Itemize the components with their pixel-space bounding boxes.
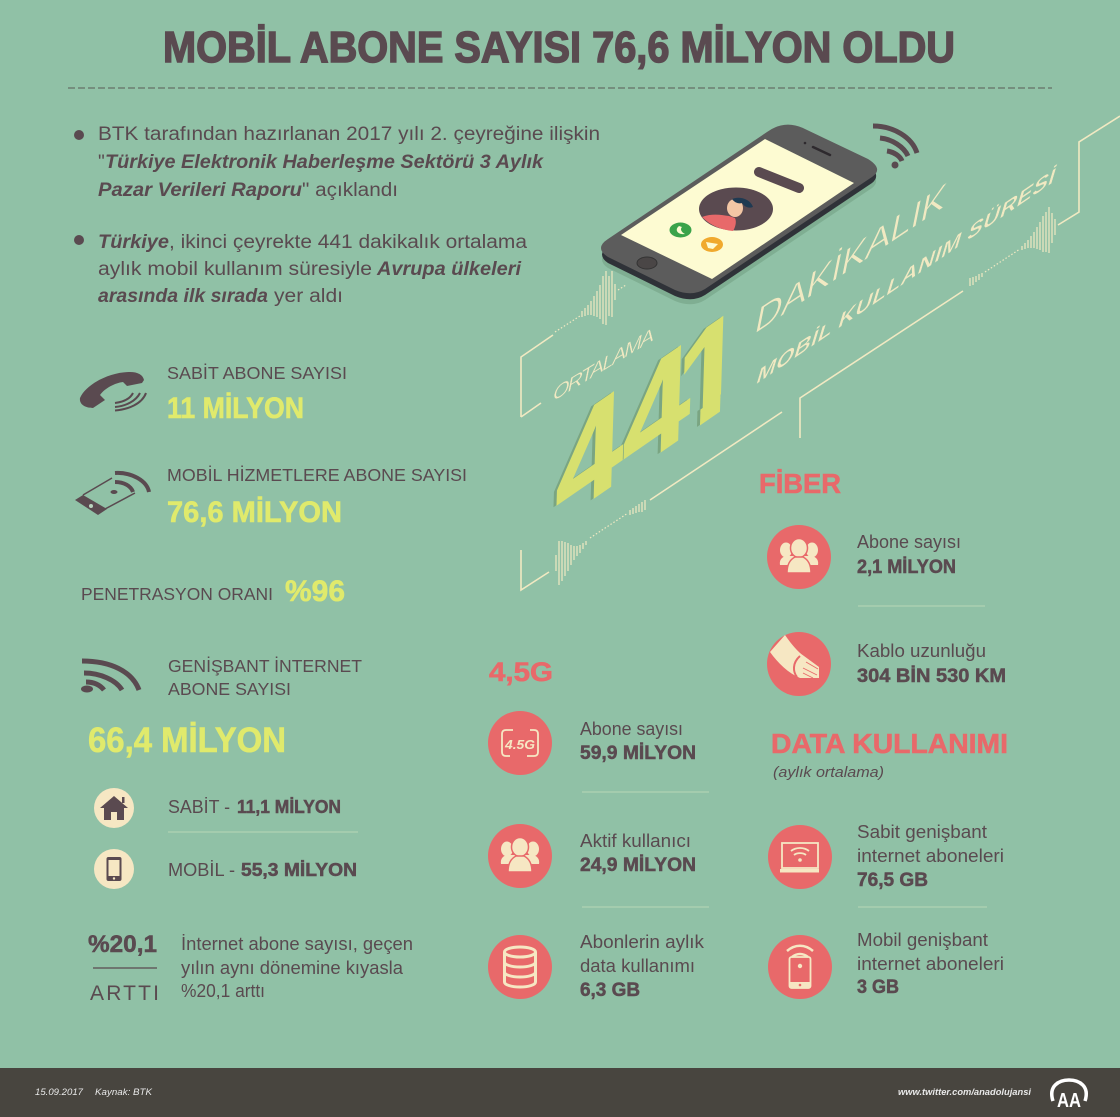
icon: 4.5G badge (488, 711, 552, 775)
panel: annual increase: ARTTI (90, 982, 159, 1005)
big number shadow (554, 318, 720, 507)
footer bar: www.twitter.com/anadolujansi (898, 1087, 1032, 1097)
item: mobile broadband data (768, 930, 1004, 999)
big number: 4 (621, 310, 693, 508)
item: fixed broadband: 11,1 MİLYON (237, 797, 341, 817)
big number: 1 (674, 273, 746, 471)
big number (556, 316, 724, 506)
item: active users: 24,9 MİLYON (580, 855, 696, 876)
item: monthly data per subscriber: Abonlerin aylık (580, 932, 705, 952)
big number shadow: 4 (551, 358, 623, 556)
text block: report intro: Pazar Verileri Raporu (98, 180, 302, 201)
text block: report intro (74, 124, 600, 201)
icon: fiber cable (767, 632, 831, 696)
panel: broadband subscribers: GENİŞBANT İNTERNET (168, 656, 362, 676)
heading: data usage: (aylık ortalama) (773, 765, 884, 781)
text block: usage ranking (74, 232, 527, 307)
callout: 441 minutes: MOBİL KULLANIM SÜRESİ (753, 161, 1059, 390)
item: mobile broadband data: Mobil genişbant (857, 930, 988, 950)
item: 4.5G subscribers: 59,9 MİLYON (580, 743, 696, 764)
callout: 441 minutes: ORTALAMA (551, 321, 657, 407)
panel: mobile subscribers: MOBİL HİZMETLERE ABONE SAYISI (167, 465, 467, 485)
icon: phone signal (873, 126, 917, 168)
item: 4.5G subscribers (488, 711, 696, 775)
panel: annual increase: İnternet abone sayısı, geçen (181, 934, 413, 954)
item: fixed broadband data (768, 822, 1004, 891)
panel: annual increase (88, 931, 413, 1005)
panel: fixed subscribers: 11 MİLYON (167, 392, 304, 425)
item: fixed broadband: SABİT - (168, 797, 230, 817)
heading: fiber: FİBER (759, 468, 841, 499)
item: fiber subscribers: Abone sayısı (857, 532, 961, 552)
text block: report intro: " (98, 152, 105, 173)
item: mobile broadband data: internet aboneleri (857, 954, 1004, 974)
item: fixed broadband data: internet aboneleri (857, 846, 1004, 866)
icon: broadband signal (81, 661, 139, 692)
item: fixed broadband data: Sabit genişbant (857, 822, 987, 842)
panel: annual increase: yılın aynı dönemine kıyasla (181, 958, 404, 978)
panel: mobile subscribers (75, 465, 467, 529)
heading: data usage (771, 728, 1008, 781)
panel: annual increase: %20,1 (88, 931, 157, 958)
text block: usage ranking: Türkiye (98, 232, 169, 253)
icon: users (488, 824, 552, 888)
item: 4.5G subscribers: Abone sayısı (580, 719, 683, 739)
text block: usage ranking: arasında ilk sırada (98, 286, 268, 307)
text block: usage ranking: Avrupa ülkeleri (376, 259, 522, 280)
item: fiber cable length: 304 BİN 530 KM (857, 666, 1006, 687)
panel: fixed subscribers: SABİT ABONE SAYISI (167, 363, 347, 383)
panel: mobile subscribers: 76,6 MİLYON (167, 496, 342, 529)
panel: fixed subscribers (80, 363, 347, 425)
panel: broadband subscribers (81, 656, 362, 760)
text block: report intro: Türkiye Elektronik Haberleşme Sektörü 3 Aylık (105, 152, 544, 173)
panel: penetration rate: %96 (285, 575, 345, 608)
isometric line frame with waveforms (521, 116, 1120, 590)
panel: annual increase: %20,1 arttı (181, 981, 265, 1001)
text block: report intro: " açıklandı (302, 180, 398, 201)
callout: 441 minutes: DAKİKALIK (751, 173, 951, 343)
panel: penetration rate: PENETRASYON ORANI (81, 584, 273, 604)
icon: agency logo: AA (1057, 1090, 1081, 1112)
item: active users (488, 824, 696, 888)
item: monthly data per subscriber (488, 932, 705, 1001)
callout: 441 minutes (551, 161, 1059, 556)
panel: penetration rate (81, 575, 345, 608)
item: monthly data per subscriber: 6,3 GB (580, 980, 640, 1001)
item: mobile broadband (94, 849, 357, 889)
item: fixed broadband data: 76,5 GB (857, 870, 928, 891)
icon: phone (94, 849, 134, 889)
text block: usage ranking: , ikinci çeyrekte 441 dakikalık ortalama (169, 232, 527, 253)
item: mobile broadband: MOBİL - (168, 860, 235, 880)
item: fiber subscribers: 2,1 MİLYON (857, 557, 956, 578)
panel: broadband subscribers: ABONE SAYISI (168, 679, 291, 699)
icon: tilted phone with signal (75, 473, 149, 515)
icon: telephone handset (80, 372, 146, 410)
icon: laptop with wifi (768, 825, 832, 889)
item: fiber subscribers (767, 525, 961, 589)
item: fiber cable length (767, 632, 1006, 696)
item: fixed broadband (94, 788, 341, 828)
big number: 4 (554, 356, 626, 554)
icon: agency logo (1052, 1080, 1086, 1112)
icon: users (767, 525, 831, 589)
item: monthly data per subscriber: data kullanımı (580, 956, 695, 976)
footer bar (0, 1068, 1120, 1117)
text block: report intro: BTK tarafından hazırlanan 2017 yılı 2. çeyreğine ilişkin (98, 124, 600, 145)
icon: smartphone (601, 125, 877, 304)
item: mobile broadband: 55,3 MİLYON (241, 860, 357, 880)
panel: broadband subscribers: 66,4 MİLYON (88, 721, 286, 760)
footer bar: Kaynak: BTK (95, 1087, 153, 1097)
footer bar: 15.09.2017 (35, 1087, 84, 1097)
item: mobile broadband data: 3 GB (857, 977, 899, 998)
item: active users: Aktif kullanıcı (580, 831, 691, 851)
heading: 4.5G: 4,5G (489, 657, 553, 687)
text block: usage ranking: aylık mobil kullanım süresiyle (98, 259, 372, 280)
icon: database (488, 935, 552, 999)
icon: 4.5G badge: 4.5G (504, 737, 535, 752)
item: fiber cable length: Kablo uzunluğu (857, 641, 986, 661)
icon: house (94, 788, 134, 828)
title: MOBİL ABONE SAYISI 76,6 MİLYON OLDU (163, 23, 955, 72)
big number shadow: 1 (671, 275, 743, 473)
heading: data usage: DATA KULLANIMI (771, 728, 1008, 759)
icon: phone with wifi (768, 935, 832, 999)
big number shadow: 4 (618, 311, 690, 509)
text block: usage ranking: yer aldı (274, 286, 343, 307)
